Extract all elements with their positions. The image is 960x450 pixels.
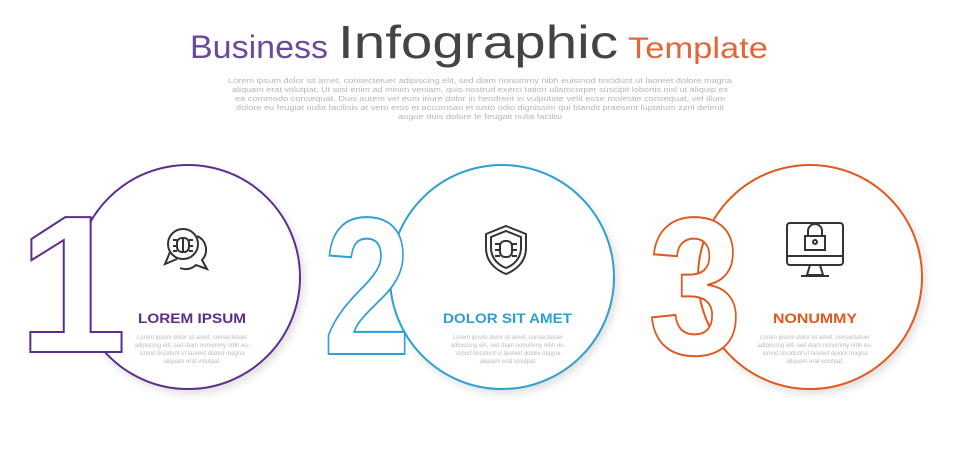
heading: NONUMMY [773, 310, 858, 326]
number 1: 1 [18, 175, 127, 394]
body text: ismod tincidunt ut laoreet dolore magna [139, 351, 245, 357]
intro text: augue duis dolore te feugait nulla facilisi [398, 112, 562, 121]
panel: step 3 [648, 165, 922, 396]
panel: step 1 [18, 165, 300, 394]
icon: bug chat [165, 229, 207, 269]
heading: LOREM IPSUM [138, 310, 246, 326]
body text [757, 335, 873, 365]
intro text: Lorem ipsum dolor sit amet, consectetuer adipiscing elit, sed diam nonummy nibh euismod tincidunt ut laoreet dolore magna [228, 76, 733, 85]
number 3: 3 [648, 177, 742, 396]
title: Template [628, 32, 768, 65]
body text [450, 335, 566, 365]
body text: adipiscing elit, sed diam nonummy nibh eu- [134, 343, 250, 349]
intro text: ea commodo consequat. Duis autem vel eum iriure dolor in hendrerit in vulputate velit esse molestie consequat, vel illum [235, 94, 725, 103]
title: Business [190, 29, 328, 65]
icon: shield bug [486, 226, 526, 274]
panel: step 2 [323, 165, 614, 396]
body text: aliquam erat volutpat. [479, 359, 537, 365]
body text [134, 335, 250, 365]
number 2: 2 [323, 177, 411, 396]
body text: ismod tincidunt ut laoreet dolore magna [455, 351, 561, 357]
intro text [228, 76, 733, 121]
title: Infographic [338, 16, 618, 68]
body text: ismod tincidunt ut laoreet dolore magna [762, 351, 868, 357]
intro text: aliquam erat volutpat. Ut wisi enim ad minim veniam, quis nostrud exerci tation ullamcorper suscipit lobortis nisl ut aliquip ex [232, 85, 728, 94]
icon: locked monitor [787, 223, 843, 276]
heading: DOLOR SIT AMET [443, 310, 572, 326]
intro text: dolore eu feugiat nulla facilisis at vero eros et accumsan et iusto odio dignissim qui blandit praesent luptatum zzril delenit [236, 103, 724, 112]
body text: Lorem ipsum dolor sit amet, consectetuer [760, 335, 870, 341]
body text: aliquam erat volutpat. [163, 359, 221, 365]
body text: aliquam erat volutpat. [786, 359, 844, 365]
body text: adipiscing elit, sed diam nonummy nibh eu- [450, 343, 566, 349]
body text: Lorem ipsum dolor sit amet, consectetuer [453, 335, 563, 341]
title [190, 16, 768, 68]
body text: adipiscing elit, sed diam nonummy nibh eu- [757, 343, 873, 349]
body text: Lorem ipsum dolor sit amet, consectetuer [137, 335, 247, 341]
